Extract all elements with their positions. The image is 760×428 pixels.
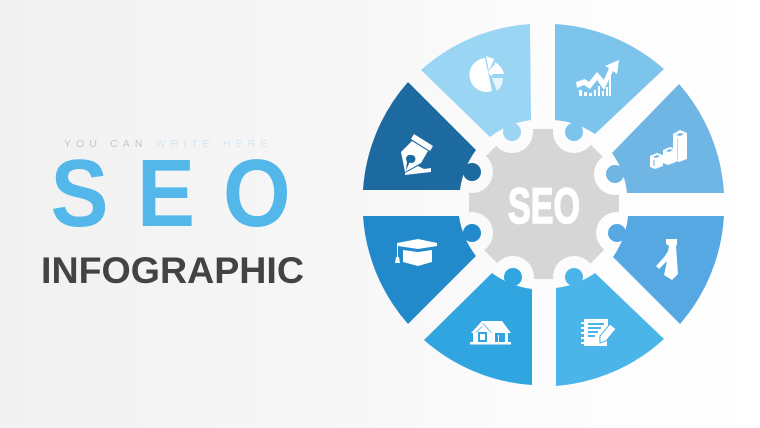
segment: house	[424, 268, 532, 385]
segment: notebook and pencil	[556, 268, 664, 386]
icon: necktie	[656, 239, 678, 280]
segment: pie chart	[421, 24, 531, 141]
title: SEO	[50, 140, 291, 247]
segment: graduation cap	[363, 216, 481, 324]
segment: fountain pen	[363, 82, 481, 190]
title: INFOGRAPHIC: INFOGRAPHIC	[41, 249, 304, 291]
center gear	[469, 129, 619, 279]
title: SEO: O	[223, 140, 291, 247]
icon: graduation cap	[395, 239, 437, 266]
icon: notebook	[581, 319, 616, 346]
subtitle: YOU CAN WRITE HERE	[64, 138, 272, 150]
segment: growth chart	[555, 24, 664, 141]
icon: pie chart	[469, 56, 504, 92]
segment: necktie	[608, 216, 724, 324]
icon: fountain pen	[401, 134, 433, 175]
title: SEO: E	[137, 140, 195, 247]
gear label: SEO	[508, 178, 580, 234]
icon: house	[470, 321, 511, 344]
segment: bar blocks	[606, 84, 724, 193]
title: SEO: S	[50, 140, 109, 247]
icon: growth chart	[576, 60, 619, 96]
icon: 3D bars	[650, 130, 687, 169]
